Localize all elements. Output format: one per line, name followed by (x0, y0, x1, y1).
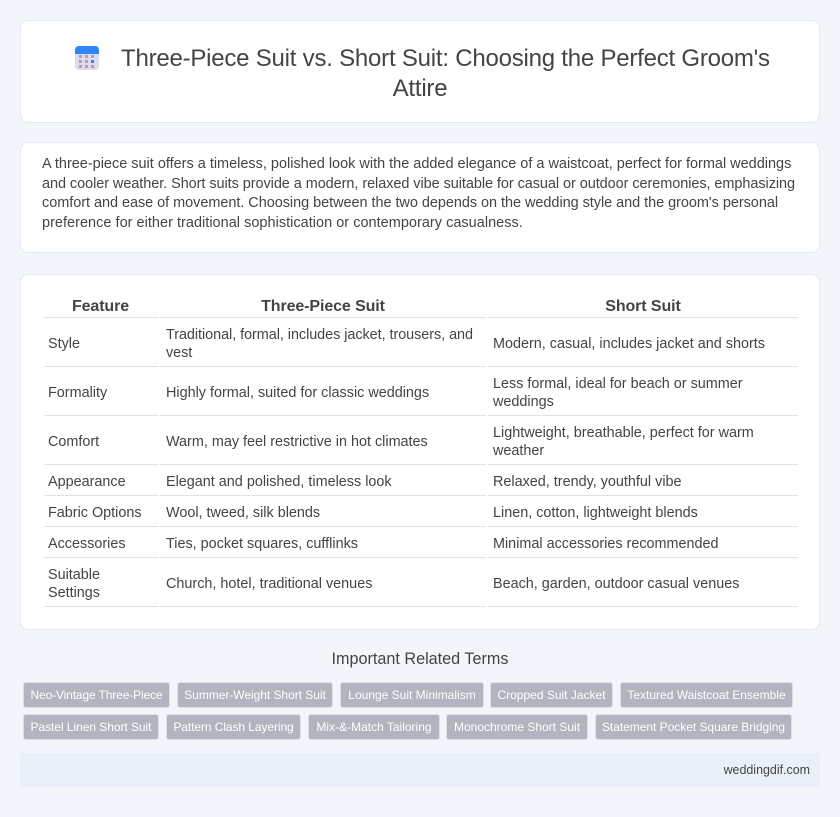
intro paragraph: A three-piece suit offers a timeless, polished look with the added elegance of a waistcoat, perfect for formal weddings (42, 156, 791, 172)
row: fabric options: Linen, cotton, lightweight blends (493, 505, 698, 521)
row: comfort: Warm, may feel restrictive in hot climates (166, 434, 428, 450)
title (121, 45, 770, 102)
related term tags: Lounge Suit Minimalism (348, 688, 476, 702)
footer source: weddingdif.com (724, 763, 810, 777)
row: appearance (48, 474, 682, 490)
row: style: vest (166, 345, 192, 361)
row: fabric options: Wool, tweed, silk blends (166, 505, 320, 521)
row: suitable settings: Suitable (48, 567, 100, 583)
related term tags: Pattern Clash Layering (173, 720, 294, 734)
row: suitable settings: Beach, garden, outdoor casual venues (493, 576, 739, 592)
row: accessories: Accessories (48, 536, 126, 552)
row: suitable settings: Church, hotel, traditional venues (166, 576, 372, 592)
row: formality (48, 376, 743, 410)
related term tags: Statement Pocket Square Bridging (602, 720, 785, 734)
intro paragraph: comfort and ease of movement. Choosing between the two depends on the wedding style and the groom's personal (42, 195, 778, 211)
row: formality: Highly formal, suited for classic weddings (166, 385, 429, 401)
row: appearance: Appearance (48, 474, 126, 490)
row: suitable settings (48, 567, 739, 601)
row: accessories (48, 536, 719, 552)
row: comfort: Lightweight, breathable, perfect for warm (493, 425, 754, 441)
row: accessories: Ties, pocket squares, cufflinks (166, 536, 358, 552)
table heading row (72, 298, 681, 315)
row: style: Style (48, 336, 80, 352)
related term tags: Monochrome Short Suit (454, 720, 580, 734)
table heading row: Short Suit (605, 298, 681, 315)
related term tags: Summer-Weight Short Suit (184, 688, 326, 702)
row: appearance: Elegant and polished, timeless look (166, 474, 392, 490)
row: formality: Formality (48, 385, 107, 401)
intro paragraph (42, 156, 795, 231)
row: style: Modern, casual, includes jacket and shorts (493, 336, 765, 352)
title: Attire (393, 74, 447, 102)
row: suitable settings: Settings (48, 585, 100, 601)
row: formality: Less formal, ideal for beach or summer (493, 376, 743, 392)
related term tags (23, 682, 793, 740)
row: comfort: weather (493, 443, 544, 459)
row: fabric options: Fabric Options (48, 505, 142, 521)
intro paragraph: and cooler weather. Short suits provide a modern, relaxed vibe suitable for casual or outdoor ceremonies, emphasizing (42, 176, 795, 192)
related term tags: Pastel Linen Short Suit (31, 720, 151, 734)
panel: introduction text (20, 142, 820, 253)
table heading row: Three-Piece Suit (261, 298, 385, 315)
footer (20, 753, 820, 787)
row: comfort: Comfort (48, 434, 99, 450)
related term tags: Mix-&-Match Tailoring (316, 720, 432, 734)
related term tags: Textured Waistcoat Ensemble (627, 688, 786, 702)
panel: header (20, 20, 820, 123)
intro paragraph: preference for either traditional sophistication or contemporary casualness. (42, 215, 523, 231)
row: accessories: Minimal accessories recommended (493, 536, 719, 552)
panel: comparison table (20, 274, 820, 630)
related term tags: Cropped Suit Jacket (497, 688, 606, 702)
heading: important related terms: Important Related Terms (332, 650, 508, 668)
related term tags: Neo-Vintage Three-Piece (30, 688, 162, 702)
row: style (48, 327, 765, 361)
row: style: Traditional, formal, includes jacket, trousers, and (166, 327, 473, 343)
row: formality: weddings (493, 394, 554, 410)
title: Three-Piece Suit vs. Short Suit: Choosing the Perfect Groom's (121, 45, 770, 72)
table heading row: Feature (72, 298, 129, 315)
row: comfort (48, 425, 754, 459)
row: appearance: Relaxed, trendy, youthful vibe (493, 474, 682, 490)
icon: calendar (75, 46, 99, 70)
row: fabric options (48, 505, 698, 521)
